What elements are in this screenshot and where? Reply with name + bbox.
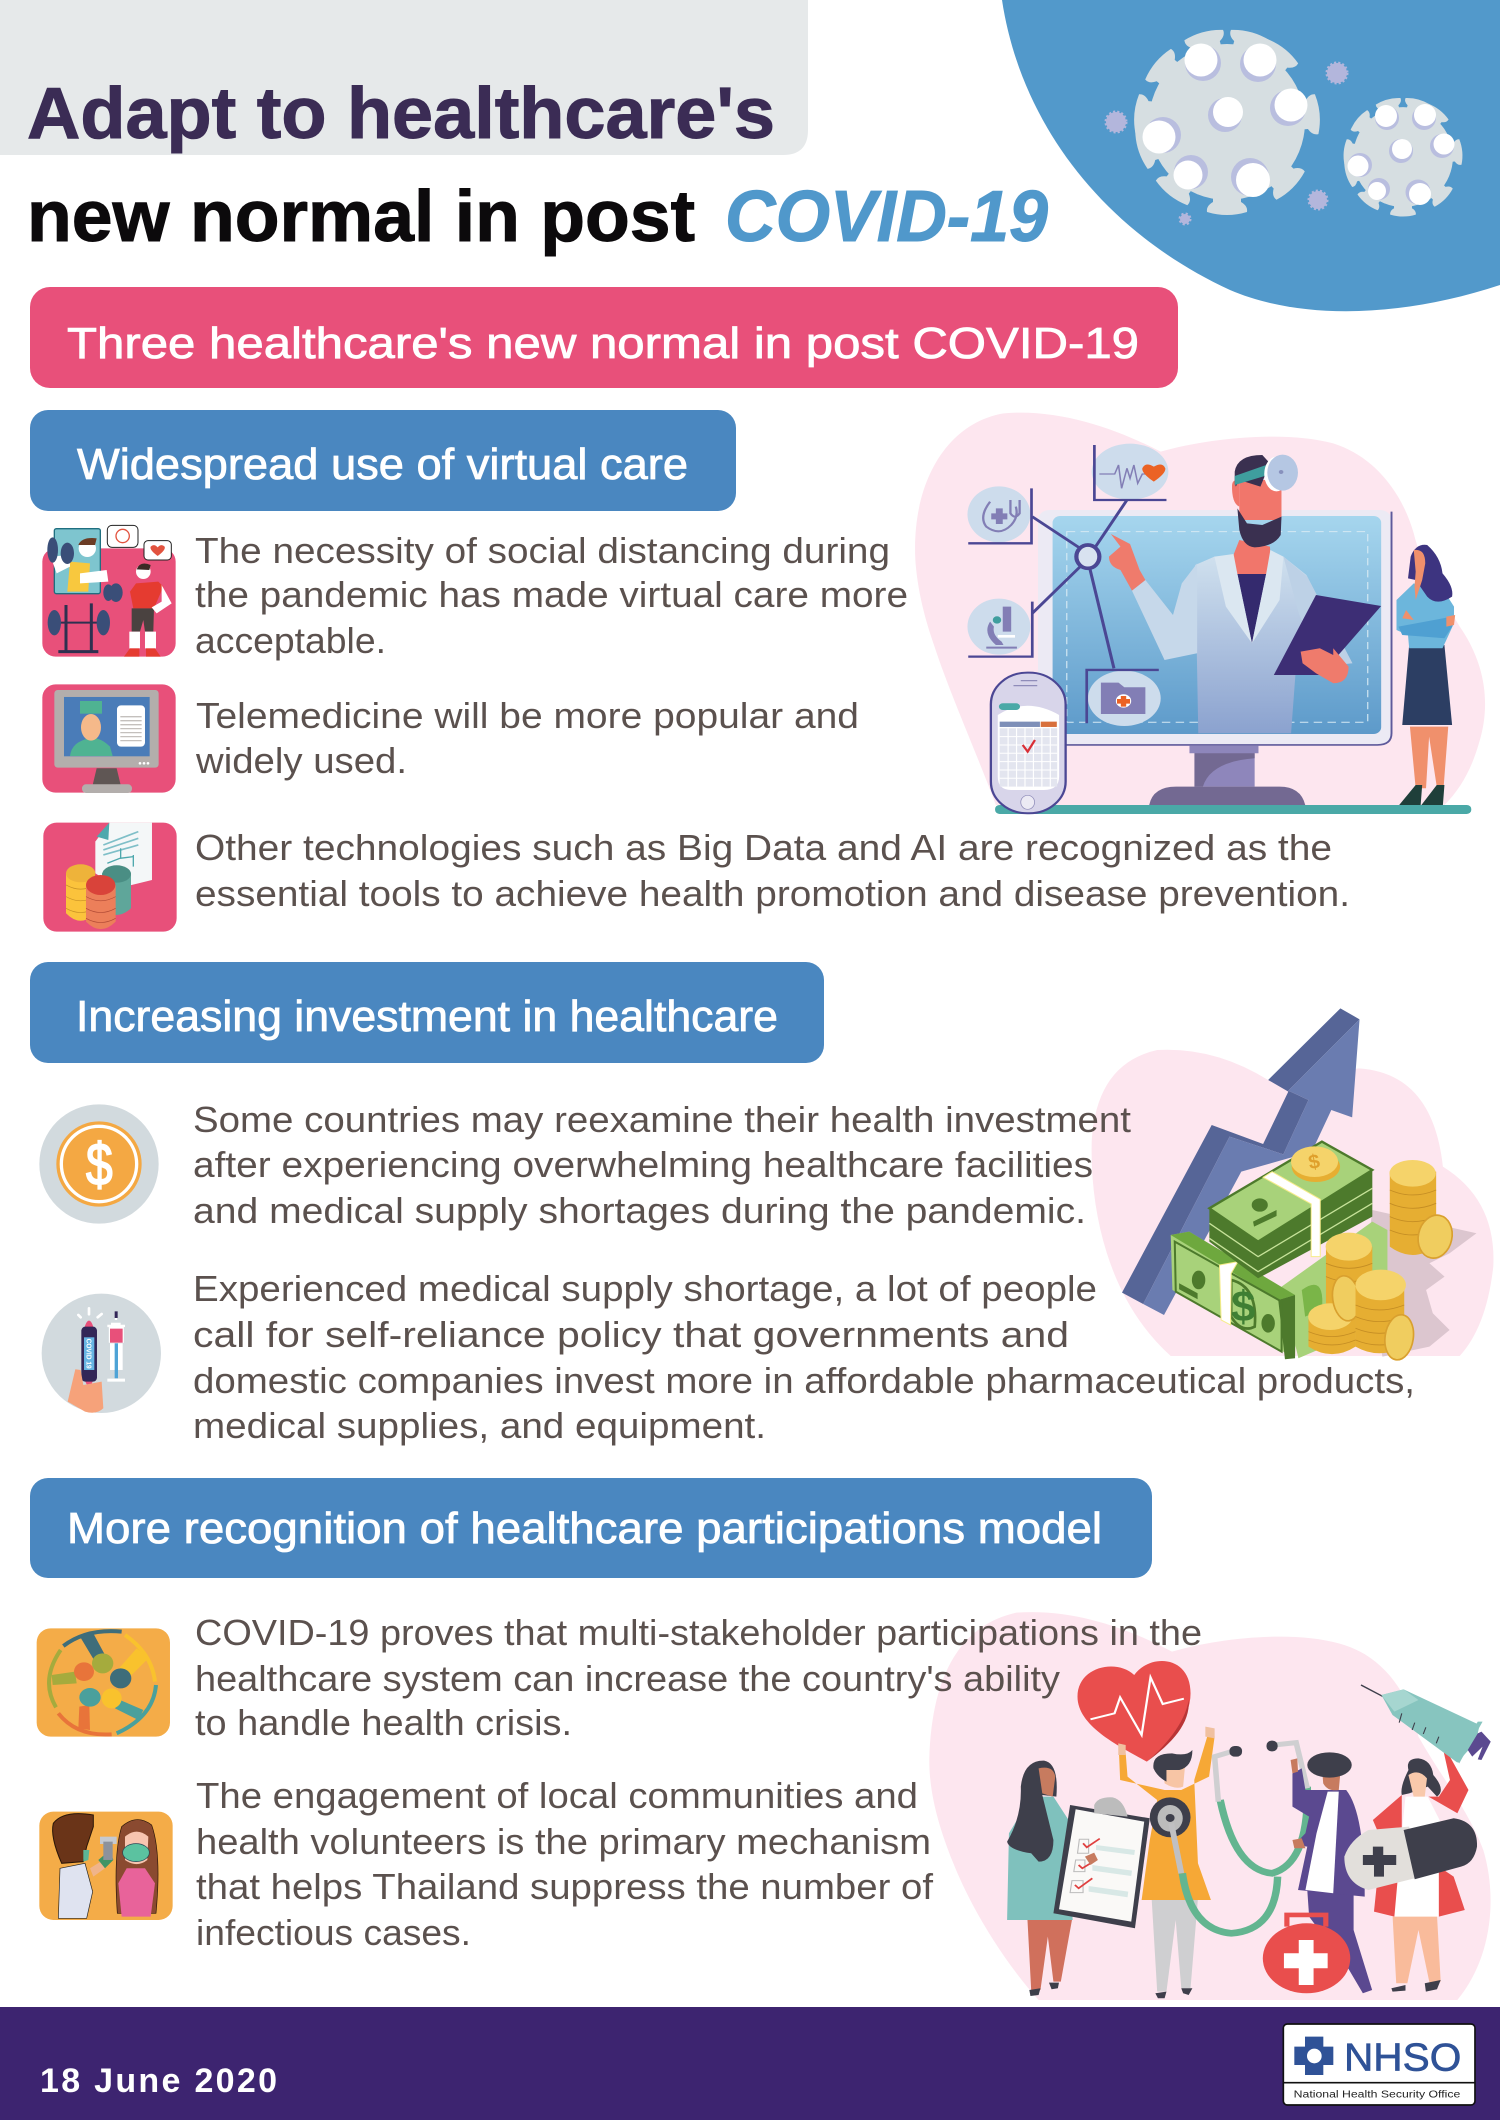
text block: multi-stakeholder <box>195 1612 1202 1743</box>
icon: big data and AI <box>43 823 177 932</box>
title background panel <box>0 0 808 155</box>
coin on top <box>1291 1146 1340 1182</box>
text block: social distancing: acceptable. <box>195 620 386 661</box>
first aid bag <box>1263 1915 1350 1993</box>
heading banner: three new normals <box>30 287 1178 388</box>
text block: social distancing: the pandemic has made virtual care more <box>195 574 908 615</box>
footer bar <box>0 2007 1500 2120</box>
text block: local communities: health volunteers is the primary mechanism <box>196 1821 931 1862</box>
text block: multi-stakeholder: COVID-19 proves that multi-stakeholder participations in the <box>195 1612 1202 1653</box>
text block: telemedicine <box>195 695 859 781</box>
icon: covid test and syringe: COVID 19 <box>85 1339 94 1369</box>
illustration: people with healthcare items <box>929 1612 1491 2000</box>
ground bar <box>995 805 1471 814</box>
heading: investment: Increasing investment in healthcare <box>76 992 778 1041</box>
doctor <box>1109 455 1381 733</box>
coin on top: $ <box>1307 1151 1322 1174</box>
text block: multi-stakeholder: to handle health crisis. <box>195 1702 572 1743</box>
woman with clipboard <box>1007 1761 1150 1996</box>
lower cash stack <box>1171 1222 1387 1359</box>
icon bubble: medical folder <box>1087 670 1161 726</box>
monitor <box>1038 510 1392 805</box>
text block: health investment: Some countries may reexamine their health investment <box>193 1099 1131 1140</box>
icon: temperature check <box>39 1812 173 1920</box>
text block: health investment <box>193 1099 1131 1231</box>
text block: health investment: after experiencing overwhelming healthcare facilities <box>193 1144 1093 1185</box>
woman standing <box>1397 545 1455 805</box>
icon group: virtual care <box>42 525 177 932</box>
upper cash stack <box>1209 1142 1372 1278</box>
icon: video workout <box>42 525 176 657</box>
coin stacks <box>1308 1160 1456 1362</box>
text block: big data and AI: essential tools to achieve health promotion and disease prevention. <box>195 873 1350 914</box>
text block: health investment: and medical supply shortages during the pandemic. <box>193 1190 1086 1231</box>
decorative corner: blue curve with viruses <box>1002 0 1500 311</box>
icon: covid test and syringe <box>42 1294 161 1413</box>
phone with calendar <box>991 673 1066 813</box>
heart with pulse <box>1078 1661 1191 1762</box>
logo: NHSO: NHSO <box>1344 2036 1461 2080</box>
text block: local communities: The engagement of local communities and <box>196 1775 918 1816</box>
icon: dollar coin <box>39 1104 159 1224</box>
title: new normal in post <box>27 177 695 257</box>
text block: self-reliance: medical supplies, and equipment. <box>193 1405 766 1446</box>
icon bubble: microscope <box>967 599 1032 657</box>
text block: social distancing: The necessity of social distancing during <box>195 530 890 571</box>
text block: multi-stakeholder: healthcare system can increase the country's ability <box>195 1658 1060 1699</box>
text block: self-reliance: Experienced medical supply shortage, a lot of people <box>193 1268 1097 1309</box>
logo: NHSO <box>1283 2024 1475 2105</box>
text block: social distancing <box>195 530 908 661</box>
lower cash stack: $ <box>1231 1284 1256 1332</box>
icon bubble: heart rate <box>1092 444 1168 500</box>
text block: telemedicine: Telemedicine will be more popular and <box>196 695 859 736</box>
network connector <box>1032 500 1127 668</box>
text block: big data and AI <box>195 827 1350 914</box>
text block: local communities <box>196 1775 934 1953</box>
man in orange with raised arms <box>1118 1727 1215 1998</box>
text block: big data and AI: Other technologies such as Big Data and AI are recognized as the <box>195 827 1332 868</box>
text block: local communities: that helps Thailand suppress the number of <box>196 1866 934 1907</box>
logo: NHSO: National Health Security Office <box>1294 2089 1461 2100</box>
icon: small virus <box>1342 96 1463 217</box>
shadows <box>1366 1210 1476 1357</box>
woman with syringe and pill <box>1344 1743 1477 1992</box>
arrow <box>1122 1008 1360 1315</box>
date: 18 June 2020 <box>40 2062 277 2100</box>
title: Adapt to healthcare's <box>27 74 775 154</box>
text block: telemedicine: widely used. <box>195 740 407 781</box>
heading: participation model <box>30 1478 1152 1578</box>
illustration: virtual care doctor on monitor <box>915 413 1485 814</box>
heading: virtual care <box>30 410 736 511</box>
icon: dollar coin: $ <box>86 1131 113 1198</box>
title: COVID-19 <box>725 177 1048 257</box>
title <box>27 74 1048 257</box>
heading banner: three new normals: Three healthcare's new normal in post COVID-19 <box>67 319 1139 368</box>
syringe <box>1361 1685 1491 1763</box>
icon: telemedicine monitor <box>42 684 176 793</box>
icon: joined hands <box>37 1628 170 1737</box>
icon bubble: stethoscope <box>967 486 1032 543</box>
stethoscope tube <box>1171 1743 1307 1933</box>
text block: self-reliance: call for self-reliance policy that governments and <box>193 1314 1069 1355</box>
illustration: rising arrow, cash and coins <box>1092 1008 1493 1362</box>
man in purple <box>1291 1752 1372 1993</box>
text block: local communities: infectious cases. <box>196 1912 471 1953</box>
heading: investment <box>30 962 824 1063</box>
heading: participation model: More recognition of healthcare participations model <box>67 1504 1102 1553</box>
heading: virtual care: Widespread use of virtual care <box>77 440 688 489</box>
text block: self-reliance: domestic companies invest more in affordable pharmaceutical products, <box>193 1360 1415 1401</box>
text block: self-reliance <box>193 1268 1415 1446</box>
icon: large virus <box>1132 27 1321 215</box>
